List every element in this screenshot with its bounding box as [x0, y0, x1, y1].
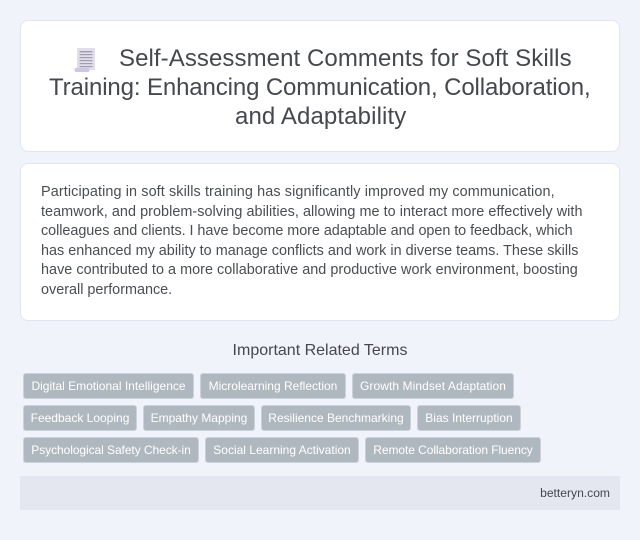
- tag: Remote Collaboration Fluency: [373, 443, 533, 457]
- tag: [143, 405, 255, 431]
- tag: Resilience Benchmarking: [268, 411, 404, 425]
- tag: [200, 373, 346, 399]
- paragraph text: teamwork, and problem-solving abilities, allowing me to interact more effectively with: [41, 204, 583, 220]
- tag: Bias Interruption: [425, 411, 513, 425]
- tag: [205, 437, 359, 463]
- tag: Psychological Safety Check-in: [31, 443, 191, 457]
- panel: title: [20, 20, 620, 152]
- panel: self-assessment paragraph: [20, 163, 620, 321]
- paragraph text: overall performance.: [41, 282, 172, 298]
- footer bar: [20, 476, 620, 510]
- tag: Digital Emotional Intelligence: [31, 379, 186, 393]
- tag: [23, 437, 199, 463]
- tag: [365, 437, 541, 463]
- title line 2: Training: Enhancing Communication, Collaboration,: [49, 74, 591, 101]
- footer source text: betteryn.com: [540, 486, 610, 500]
- tag: Empathy Mapping: [151, 411, 247, 425]
- tag: [23, 373, 194, 399]
- paragraph text: Participating in soft skills training has significantly improved my communication,: [41, 184, 555, 200]
- tag: Social Learning Activation: [213, 443, 351, 457]
- tag: Microlearning Reflection: [209, 379, 337, 393]
- tag: [261, 405, 411, 431]
- paragraph text: colleagues and clients. I have become more adaptable and open to feedback, which: [41, 223, 573, 239]
- tag: [417, 405, 521, 431]
- tag: [352, 373, 514, 399]
- tag: [23, 405, 137, 431]
- title line 1: Self-Assessment Comments for Soft Skills: [119, 45, 572, 72]
- paragraph text: have contributed to a more collaborative and productive work environment, boosting: [41, 262, 578, 278]
- tag list: [23, 373, 541, 463]
- paragraph text: [41, 184, 583, 298]
- heading: important related terms: Important Related Terms: [233, 342, 407, 359]
- paragraph text: has enhanced my ability to manage conflicts and work in diverse teams. These skills: [41, 243, 578, 259]
- title line 3: and Adaptability: [235, 103, 406, 130]
- tag: Feedback Looping: [31, 411, 129, 425]
- icon: document scroll: [74, 48, 95, 72]
- tag: Growth Mindset Adaptation: [360, 379, 506, 393]
